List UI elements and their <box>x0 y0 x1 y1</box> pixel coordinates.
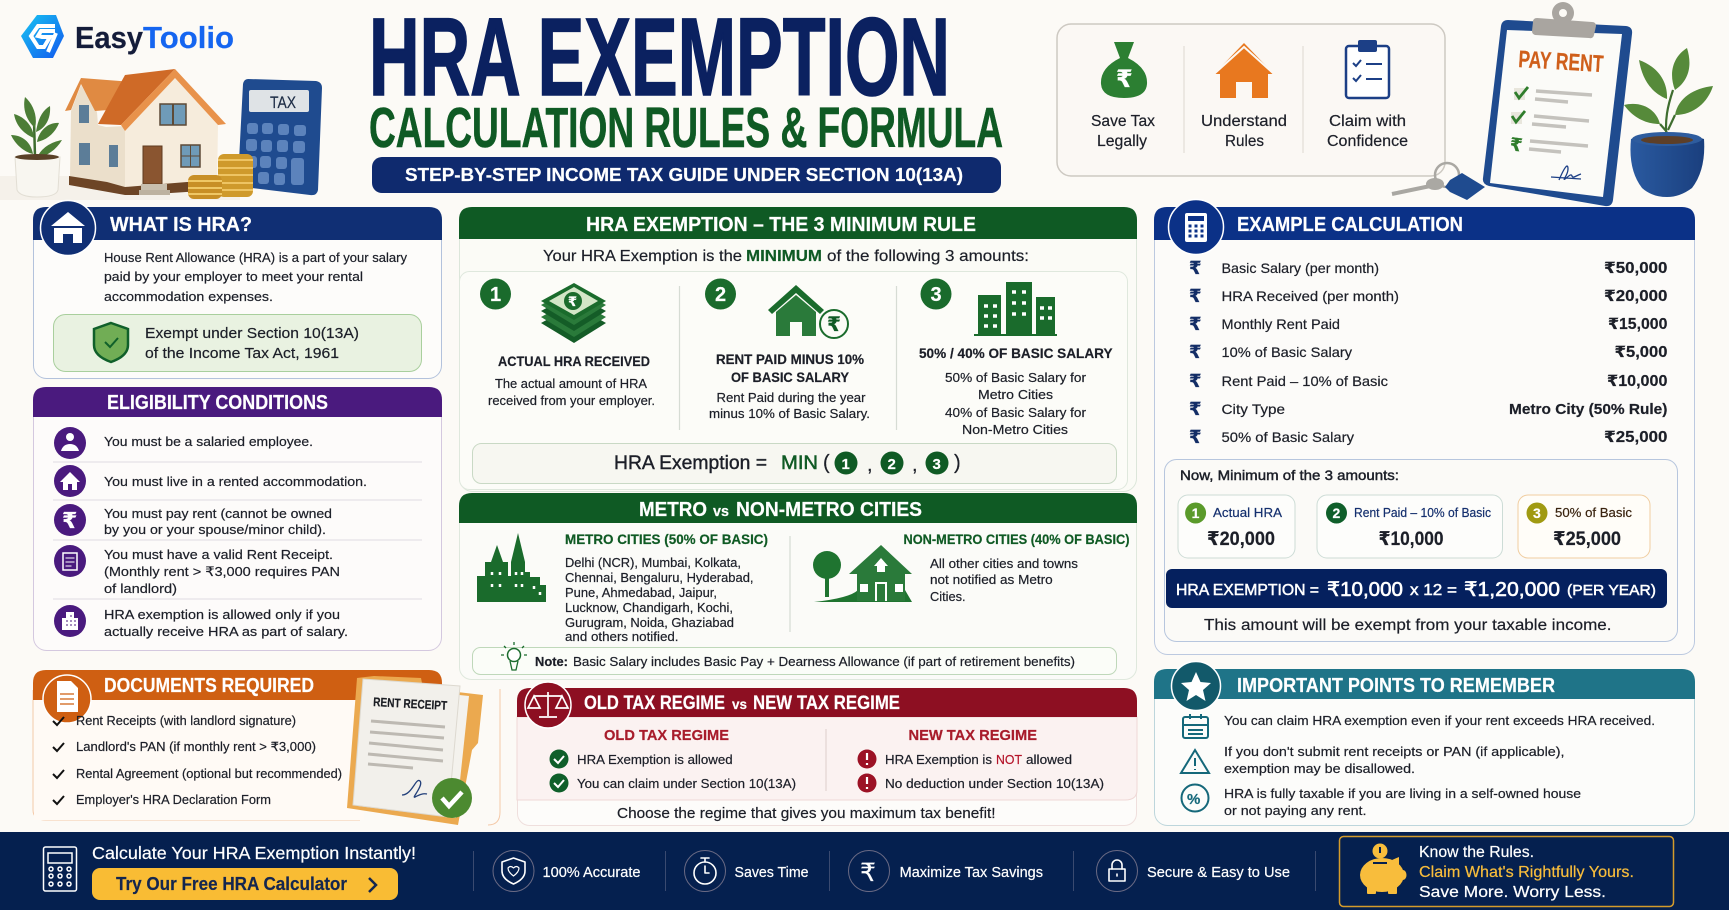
icon: house and tree <box>813 545 912 602</box>
intro sentence: MINIMUM <box>746 248 822 265</box>
new regime column: allowed <box>1026 753 1072 767</box>
point: rent receipts: exemption may be disallowed. <box>1224 761 1415 776</box>
item: salaried employee: You must be a salaried employee. <box>104 434 313 449</box>
icon: rupee: ₹ <box>62 508 77 533</box>
heading: OLD TAX REGIME <box>584 693 725 714</box>
icon: money stack: ₹ <box>568 294 577 309</box>
item: pay rent: by you or your spouse/minor child). <box>104 522 326 537</box>
icon: clipboard checklist <box>1346 40 1389 98</box>
card: actual HRA: ₹20,000 <box>1207 529 1275 550</box>
calculation rows: Monthly Rent Paid <box>1222 316 1340 332</box>
label: understand rules: Rules <box>1225 133 1264 150</box>
icon: house <box>54 465 86 497</box>
callout: section 10(13A): Exempt under Section 10(13A) <box>145 325 359 342</box>
calculation rows: 50% of Basic Salary <box>1222 429 1354 445</box>
icon: house <box>1214 43 1274 98</box>
calculation rows: ₹50,000 <box>1604 260 1667 277</box>
icon: money stack <box>541 283 606 343</box>
document list: Employer's HRA Declaration Form <box>76 793 271 807</box>
point: rent receipts: If you don't submit rent receipts or PAN (if applicable), <box>1224 744 1564 759</box>
feature: saves time: Saves Time <box>734 865 808 881</box>
icon: piggy bank <box>1360 844 1406 894</box>
new regime column: HRA Exemption is <box>885 753 992 767</box>
item: receive HRA: HRA exemption is allowed only if you <box>104 607 340 622</box>
icon: employee <box>54 427 86 459</box>
item: receive HRA <box>104 607 348 639</box>
closing advice: Choose the regime that gives you maximum tax benefit! <box>617 806 996 822</box>
label: claim with confidence: Confidence <box>1327 133 1408 150</box>
icon: money bag: ₹ <box>1116 66 1133 93</box>
icon: calendar <box>1183 714 1208 738</box>
result bar: x 12 = <box>1410 582 1457 599</box>
result bar: ₹1,20,000 <box>1464 579 1560 601</box>
metro cities text: and others notified. <box>565 630 678 644</box>
note <box>472 642 1116 674</box>
icon: star badge <box>1172 662 1220 710</box>
metro cities text <box>565 532 768 644</box>
label: understand rules: Understand <box>1201 113 1287 130</box>
panel: three benefits <box>1057 24 1445 176</box>
panel: example calculation <box>1154 200 1695 654</box>
house <box>65 69 226 195</box>
label: save tax legally <box>1091 113 1155 150</box>
illustration: pay rent clipboard: PAY RENT <box>1518 46 1604 78</box>
icon: metro skyline <box>477 533 546 602</box>
rule 2: rent paid minus 10%: RENT PAID MINUS 10% <box>716 352 864 367</box>
formula <box>472 444 1116 484</box>
plant <box>11 97 62 197</box>
closing sentence: This amount will be exempt from your taxable income. <box>1204 617 1612 634</box>
icon: money bag <box>1101 42 1147 98</box>
note: Note: <box>535 655 568 669</box>
metro cities text: Gurugram, Noida, Ghaziabad <box>565 616 734 630</box>
non-metro cities text <box>904 532 1130 604</box>
rule 3: 50% / 40% of basic: 40% of Basic Salary for <box>945 406 1086 420</box>
rule 1: actual HRA received: The actual amount of HRA <box>495 377 648 391</box>
new regime column: NOT <box>996 753 1022 767</box>
document list <box>76 714 342 807</box>
calculation rows <box>1189 258 1667 447</box>
card: actual HRA: 1 <box>1192 505 1200 521</box>
item: receive HRA: actually receive HRA as part of salary. <box>104 624 348 639</box>
panel: important points <box>1154 662 1695 826</box>
new regime column: No deduction under Section 10(13A) <box>885 777 1104 791</box>
point: fully taxable <box>1224 786 1581 818</box>
old regime column: HRA Exemption is allowed <box>577 753 733 767</box>
heading: HRA EXEMPTION – THE 3 MINIMUM RULE <box>586 214 976 236</box>
item: rent receipt: (Monthly rent > ₹3,000 requires PAN <box>104 564 340 579</box>
item: pay rent: You must pay rent (cannot be owned <box>104 506 332 521</box>
old regime column <box>550 727 796 792</box>
icon: calculator badge <box>1168 200 1224 254</box>
icon: rupee <box>54 504 86 536</box>
icon: building <box>54 605 86 637</box>
callout: section 10(13A) <box>54 314 422 372</box>
rule 3: 50% / 40% of basic: Metro Cities <box>978 388 1053 402</box>
icon: scales badge <box>525 682 571 728</box>
icon: document badge <box>43 675 91 723</box>
description: paid by your employer to meet your rental <box>104 269 363 284</box>
point: fully taxable: or not paying any rent. <box>1224 803 1366 818</box>
rule 1: actual HRA received: 1 <box>490 284 501 306</box>
rule 2: rent paid minus 10%: Rent Paid during the year <box>716 391 866 405</box>
intro sentence: of the following 3 amounts: <box>827 248 1029 265</box>
rule 1: actual HRA received: received from your employer. <box>488 394 655 408</box>
callout: know the rules: Know the Rules. <box>1419 844 1534 861</box>
feature: secure and easy: Secure & Easy to Use <box>1147 865 1290 881</box>
intro sentence: Your HRA Exemption is the <box>543 248 742 265</box>
old regime column: You can claim under Section 10(13A) <box>577 777 796 791</box>
metro cities text: Pune, Ahmedabad, Jaipur, <box>565 586 717 600</box>
rule 3: 50% / 40% of basic <box>919 278 1112 437</box>
point: fully taxable: HRA is fully taxable if you are living in a self-owned house <box>1224 786 1581 801</box>
feature: secure and easy <box>1096 850 1290 892</box>
calculation rows: ₹5,000 <box>1614 344 1667 361</box>
label: save tax legally: Legally <box>1097 133 1147 150</box>
heading: NEW TAX REGIME <box>753 693 900 714</box>
feature: maximize tax savings <box>848 850 1043 892</box>
non-metro cities text: NON-METRO CITIES (40% OF BASIC) <box>904 532 1130 547</box>
callout: know the rules <box>1340 836 1674 906</box>
card: 50% of basic <box>1518 495 1650 558</box>
panel: metro vs non-metro <box>459 493 1137 680</box>
gold coins <box>188 154 253 199</box>
formula: , <box>867 454 873 476</box>
logo: EasyToolio: Easy <box>75 20 144 55</box>
illustration: pay rent clipboard: ₹ <box>1508 134 1524 156</box>
rule 3: 50% / 40% of basic: 3 <box>930 284 942 306</box>
icon: house badge <box>40 200 96 256</box>
description: House Rent Allowance (HRA) is a part of your salary <box>104 250 408 265</box>
illustration: pay rent clipboard <box>1483 2 1632 206</box>
card: rent paid less 10%: Rent Paid – 10% of Basic <box>1354 505 1491 520</box>
card: actual HRA: Actual HRA <box>1213 505 1282 520</box>
card: 50% of basic: 3 <box>1533 505 1541 521</box>
subtitle: calculation rules and formula: CALCULATION RULES & FORMULA <box>369 96 1003 160</box>
icon: house and rupee <box>768 285 848 338</box>
illustration: rent receipt folder: RENT RECEIPT <box>373 695 448 713</box>
calculation rows: ₹ <box>1189 427 1202 447</box>
feature: 100% accurate: 100% Accurate <box>542 865 640 881</box>
calculation rows: Metro City (50% Rule) <box>1509 401 1667 418</box>
callout: section 10(13A): of the Income Tax Act, 1961 <box>145 345 339 362</box>
non-metro cities text: All other cities and towns <box>930 557 1078 571</box>
document list: Landlord's PAN (if monthly rent > ₹3,000) <box>76 740 316 754</box>
heading: NON-METRO CITIES <box>736 499 922 521</box>
heading: vs <box>713 503 729 520</box>
formula: 3 <box>932 456 941 473</box>
callout: know the rules: Claim What's Rightfully Yours. <box>1419 864 1634 881</box>
callout: know the rules: Save More. Worry Less. <box>1419 884 1606 901</box>
feature: 100% accurate <box>493 850 640 892</box>
label: claim with confidence <box>1327 113 1408 150</box>
heading: DOCUMENTS REQUIRED <box>104 675 314 697</box>
document list: Rent Receipts (with landlord signature) <box>76 714 296 728</box>
rule 3: 50% / 40% of basic: 50% / 40% OF BASIC SALARY <box>919 346 1112 361</box>
item: rent receipt: You must have a valid Rent Receipt. <box>104 547 333 562</box>
label: save tax legally: Save Tax <box>1091 113 1155 130</box>
result bar: (PER YEAR) <box>1567 582 1656 599</box>
heading: EXAMPLE CALCULATION <box>1237 214 1463 236</box>
formula: 2 <box>888 456 896 473</box>
calculation rows: City Type <box>1222 401 1285 417</box>
call to action: Calculate Your HRA Exemption Instantly! <box>92 843 416 863</box>
formula: , <box>912 454 918 476</box>
illustration: keys <box>1392 163 1485 200</box>
intro sentence <box>543 248 1029 265</box>
panel: documents required <box>33 670 500 825</box>
icon: calculator <box>44 847 76 891</box>
calculation rows: ₹25,000 <box>1604 429 1667 446</box>
formula: MIN <box>781 453 818 474</box>
point: rent exceeds HRA: You can claim HRA exemption even if your rent exceeds HRA received. <box>1224 713 1655 728</box>
logo: EasyToolio: Toolio <box>143 20 234 55</box>
icon: receipt <box>54 545 86 577</box>
illustration: rent receipt folder <box>347 676 483 825</box>
icon: buildings <box>974 282 1057 336</box>
metro cities text: Chennai, Bengaluru, Hyderabad, <box>565 571 754 585</box>
description <box>104 250 408 304</box>
card: rent paid less 10%: ₹10,000 <box>1378 529 1444 550</box>
heading <box>639 499 922 521</box>
calculation rows: ₹ <box>1189 342 1202 362</box>
result bar: HRA EXEMPTION = <box>1176 582 1319 599</box>
icon: warning <box>1181 750 1209 773</box>
calculation rows: ₹10,000 <box>1607 373 1667 390</box>
heading: ELIGIBILITY CONDITIONS <box>107 392 328 414</box>
section pill <box>372 157 1001 193</box>
rule 3: 50% / 40% of basic: 50% of Basic Salary for <box>945 371 1086 385</box>
call to action: Try Our Free HRA Calculator <box>116 873 347 894</box>
feature: maximize tax savings: ₹ <box>860 859 876 887</box>
rule 2: rent paid minus 10%: OF BASIC SALARY <box>731 370 849 385</box>
document list: Rental Agreement (optional but recommended) <box>76 767 342 781</box>
calculation rows: ₹15,000 <box>1608 316 1667 333</box>
formula: 1 <box>842 456 850 473</box>
metro cities text: Lucknow, Chandigarh, Kochi, <box>565 601 733 615</box>
rule 2: rent paid minus 10% <box>705 278 870 421</box>
minimum summary box: Now, Minimum of the 3 amounts: <box>1180 467 1399 483</box>
card: rent paid less 10% <box>1317 495 1502 558</box>
new regime column <box>858 727 1104 792</box>
calculation rows: ₹ <box>1189 258 1202 278</box>
card: 50% of basic: ₹25,000 <box>1553 529 1621 550</box>
rule 2: rent paid minus 10%: 2 <box>715 284 726 306</box>
rule 3: 50% / 40% of basic: Non-Metro Cities <box>962 423 1068 437</box>
call to action <box>92 843 416 900</box>
feature: saves time <box>684 850 808 892</box>
result bar <box>1166 569 1667 608</box>
formula: ( <box>823 452 830 474</box>
calculator <box>238 79 322 195</box>
new regime column: NEW TAX REGIME <box>908 727 1037 744</box>
calculation rows: ₹20,000 <box>1604 288 1667 305</box>
note: Basic Salary includes Basic Pay + Dearness Allowance (if part of retirement benefits) <box>573 655 1075 669</box>
point: rent receipts <box>1224 744 1564 776</box>
formula: ) <box>954 452 961 474</box>
label: understand rules <box>1201 113 1287 150</box>
rule 1: actual HRA received <box>480 278 655 408</box>
heading: WHAT IS HRA? <box>110 214 252 236</box>
rule 1: actual HRA received: ACTUAL HRA RECEIVED <box>498 354 650 369</box>
metro cities text: Delhi (NCR), Mumbai, Kolkata, <box>565 556 741 570</box>
item: rent receipt <box>104 547 340 596</box>
description: accommodation expenses. <box>104 289 273 304</box>
panel: 3 minimum rule <box>459 207 1137 492</box>
logo: EasyToolio <box>21 15 234 58</box>
illustration: potted plant <box>1624 48 1713 197</box>
heading: METRO <box>639 499 707 521</box>
icon: house and rupee: ₹ <box>827 314 841 336</box>
section pill: STEP-BY-STEP INCOME TAX GUIDE UNDER SECTION 10(13A) <box>405 165 963 185</box>
formula: HRA Exemption = <box>614 453 767 474</box>
metro cities text: METRO CITIES (50% OF BASIC) <box>565 532 768 547</box>
calculation rows: ₹ <box>1189 399 1202 419</box>
panel: eligibility conditions <box>33 387 442 650</box>
item: rent receipt: of landlord) <box>104 581 177 596</box>
panel: old vs new tax regime <box>517 682 1137 826</box>
item: pay rent <box>104 506 332 537</box>
calculation rows: HRA Received (per month) <box>1222 288 1399 304</box>
panel: what is HRA <box>33 200 442 378</box>
calculation rows: ₹ <box>1189 314 1202 334</box>
non-metro cities text: not notified as Metro <box>930 573 1053 587</box>
feature: maximize tax savings: Maximize Tax Savings <box>900 865 1043 881</box>
illustration: plant, house, coins and TAX calculator <box>0 69 322 200</box>
footer banner <box>0 832 1729 910</box>
icon: percent <box>1182 784 1208 812</box>
card: actual HRA <box>1178 495 1295 558</box>
calculation rows: ₹ <box>1189 286 1202 306</box>
calculation rows: ₹ <box>1189 371 1202 391</box>
result bar: ₹10,000 <box>1327 579 1403 601</box>
icon: percent: % <box>1187 791 1200 808</box>
heading: IMPORTANT POINTS TO REMEMBER <box>1237 675 1555 697</box>
minimum summary box <box>1164 460 1678 642</box>
calculator: TAX <box>270 93 296 112</box>
rule 2: rent paid minus 10%: minus 10% of Basic Salary. <box>709 407 870 421</box>
heading <box>584 693 900 714</box>
item: rented accommodation: You must live in a rented accommodation. <box>104 474 367 489</box>
calculation rows: Basic Salary (per month) <box>1222 260 1379 276</box>
heading: vs <box>732 696 747 712</box>
non-metro cities text: Cities. <box>930 590 966 604</box>
card: rent paid less 10%: 2 <box>1332 505 1340 521</box>
label: claim with confidence: Claim with <box>1329 113 1406 130</box>
old regime column: OLD TAX REGIME <box>604 727 729 744</box>
calculation rows: Rent Paid – 10% of Basic <box>1222 373 1388 389</box>
calculation rows: 10% of Basic Salary <box>1222 344 1352 360</box>
card: 50% of basic: 50% of Basic <box>1555 505 1633 520</box>
